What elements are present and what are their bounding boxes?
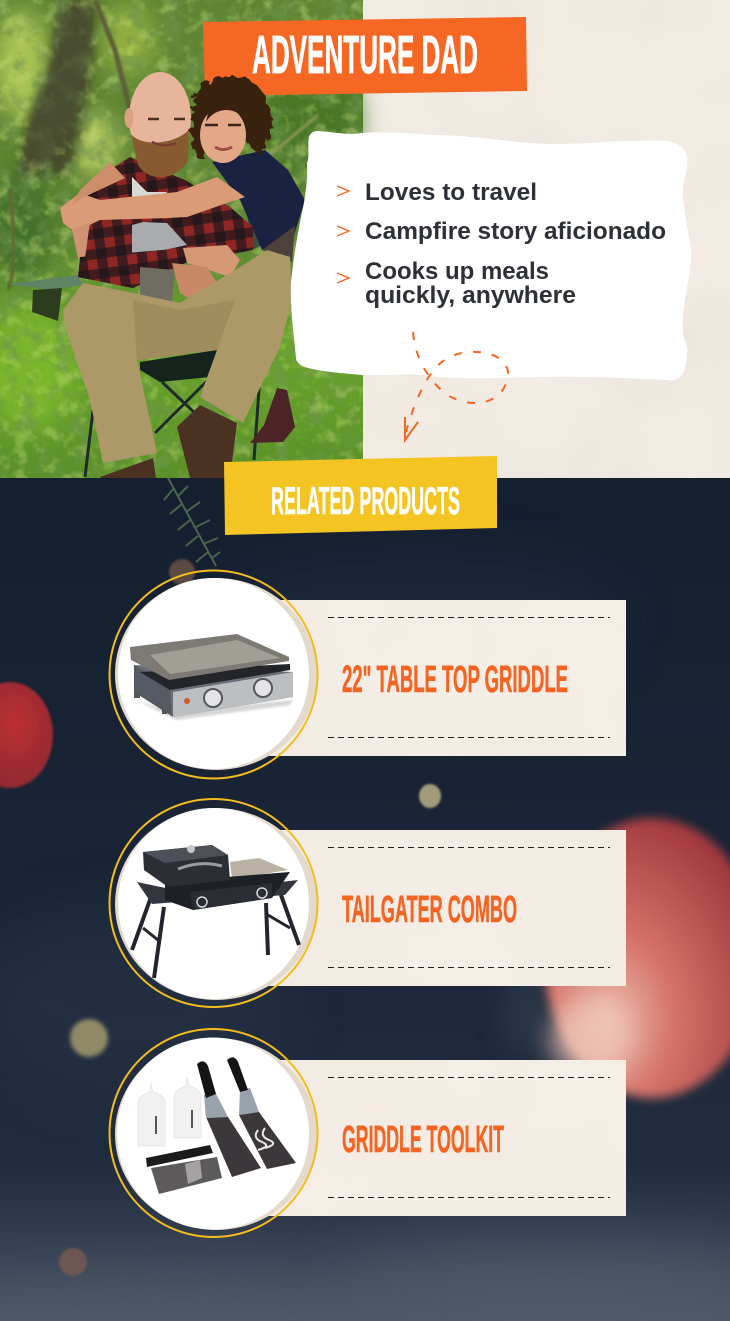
toolkit illustration	[138, 1057, 296, 1194]
bullet: campfire story: Campfire story aficionado	[365, 218, 666, 245]
camp chair	[8, 190, 262, 477]
white torn-edge panel	[291, 131, 691, 381]
griddle illustration	[130, 634, 293, 720]
related products banner: RELATED PRODUCTS	[271, 480, 460, 523]
related products banner	[224, 456, 497, 535]
boy's head	[191, 75, 272, 163]
spatula one	[204, 1092, 228, 1118]
bullet list	[337, 179, 666, 309]
white circle	[118, 808, 309, 999]
product card: tailgater	[110, 799, 626, 1007]
bullet: cooks up meals: quickly, anywhere	[365, 282, 576, 309]
rosemary sprig	[164, 478, 220, 566]
boy's hugging arm	[60, 177, 245, 232]
khaki trousers	[63, 250, 292, 463]
product card: toolkit: GRIDDLE TOOLKIT	[342, 1119, 504, 1161]
bullet: loves to travel: Loves to travel	[365, 179, 537, 206]
label panel	[262, 1060, 626, 1216]
circle shadow	[115, 1038, 317, 1230]
grey t-shirt	[132, 177, 187, 257]
boy's boot	[250, 388, 295, 443]
left tomato	[0, 682, 53, 788]
product card: tailgater: TAILGATER COMBO	[342, 889, 517, 931]
title banner: ADVENTURE DAD	[252, 25, 478, 85]
tailgater illustration	[132, 845, 299, 978]
yellow ring	[110, 799, 318, 1007]
squeeze bottles	[138, 1077, 201, 1146]
man's hand and mug	[140, 245, 240, 303]
bullet: cooks up meals: Cooks up meals	[365, 258, 549, 285]
label panel	[262, 600, 626, 756]
curly hair	[191, 75, 272, 159]
bench scraper	[151, 1157, 222, 1194]
boy's shirt	[212, 150, 305, 250]
spatula two	[239, 1088, 259, 1115]
circle shadow	[115, 578, 317, 770]
right tomato	[500, 818, 730, 1098]
product card: griddle	[110, 570, 626, 778]
bullet: cooks up meals	[337, 258, 576, 309]
circle shadow	[115, 808, 317, 1000]
photo: father and son in forest	[0, 0, 363, 478]
title banner	[203, 17, 527, 96]
floating seeds	[59, 559, 441, 1276]
yellow ring	[110, 570, 318, 778]
dark lower background	[0, 478, 730, 1321]
product card: toolkit	[110, 1029, 626, 1237]
man's plaid shirt	[78, 157, 253, 288]
paper background	[363, 0, 730, 480]
forest background	[0, 0, 363, 478]
man's boots	[177, 405, 237, 478]
white circle	[117, 1038, 309, 1230]
dashed loop arrow	[405, 332, 508, 440]
man's head	[124, 72, 191, 177]
label panel	[262, 830, 626, 986]
yellow ring	[110, 1029, 318, 1237]
white circle	[118, 578, 309, 769]
man's sleeve	[78, 248, 185, 288]
